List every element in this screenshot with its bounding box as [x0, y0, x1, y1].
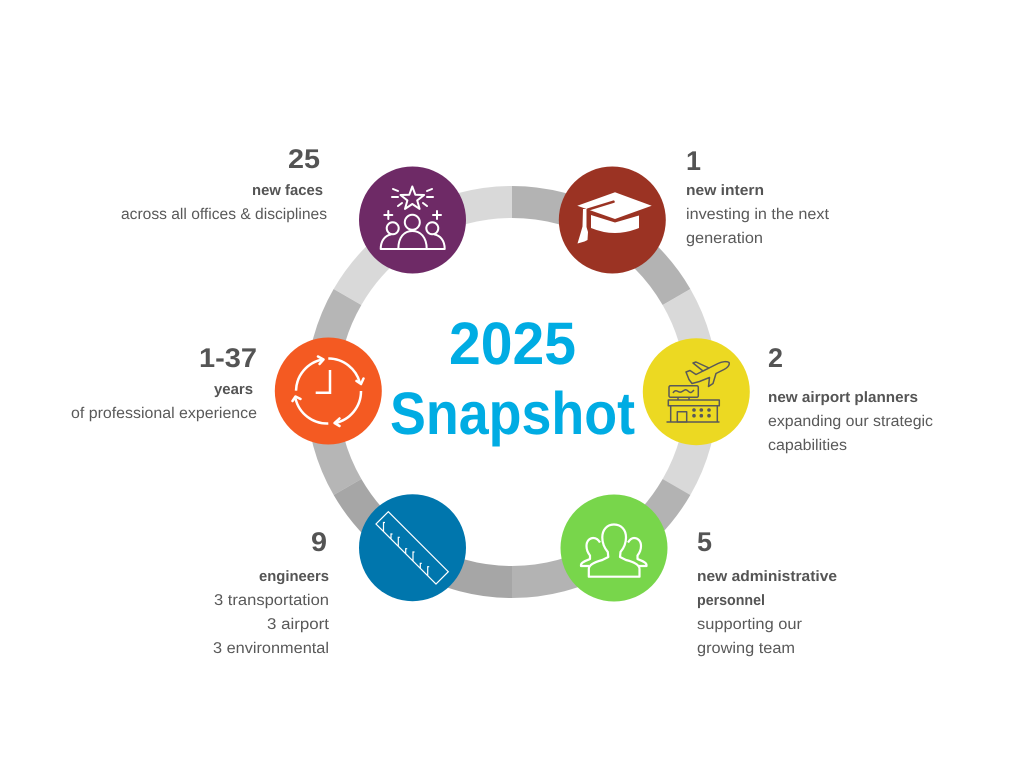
text: new airport planners: new airport planners — [768, 389, 918, 406]
title — [390, 310, 635, 447]
text: years of experience: of professional experience — [71, 405, 257, 422]
icon: new intern, graduation cap — [559, 166, 666, 274]
text: engineers — [213, 527, 330, 657]
text: new airport planners — [768, 343, 933, 454]
icon: engineers, ruler — [359, 494, 466, 601]
text: new intern: generation — [686, 230, 763, 247]
text: new intern: investing in the next — [686, 206, 830, 223]
text: new administrative personnel — [697, 527, 837, 657]
text: new faces: 25 — [288, 144, 320, 174]
text: new faces — [121, 144, 327, 223]
text: new airport planners: expanding our strategic — [768, 413, 933, 430]
text: engineers: 3 transportation — [214, 592, 329, 609]
text: new intern — [686, 146, 830, 247]
segmented ring — [322, 202, 702, 582]
text: new administrative personnel: personnel — [697, 592, 765, 609]
text: years of experience — [71, 343, 257, 422]
text: years of experience: 1-37 — [199, 343, 257, 373]
icon: experience, clock with cycle arrows — [275, 338, 382, 444]
icon: administrative personnel, three people — [560, 494, 668, 602]
icon: airport planners, plane and terminal — [643, 338, 750, 445]
title: Snapshot — [390, 380, 635, 447]
text: engineers: 3 environmental — [213, 640, 329, 657]
text: new administrative personnel: growing team — [697, 640, 795, 657]
text: new airport planners: capabilities — [768, 437, 847, 454]
text: new intern: new intern — [686, 182, 764, 199]
title: 2025 — [449, 310, 576, 377]
text: new intern: 1 — [686, 146, 701, 176]
text: years of experience: years — [214, 381, 253, 398]
text: engineers: engineers — [259, 568, 329, 585]
text: new faces: across all offices & disciplines — [121, 206, 327, 223]
text: new administrative personnel: new administrative — [697, 568, 837, 585]
icon: new faces, people and star — [359, 166, 466, 274]
text: new administrative personnel: supporting our — [697, 616, 802, 633]
text: new airport planners: 2 — [768, 343, 783, 373]
text: engineers: 9 — [311, 527, 327, 557]
text: new administrative personnel: 5 — [697, 527, 712, 557]
text: new faces: new faces — [252, 182, 323, 199]
text: engineers: 3 airport — [267, 616, 330, 633]
